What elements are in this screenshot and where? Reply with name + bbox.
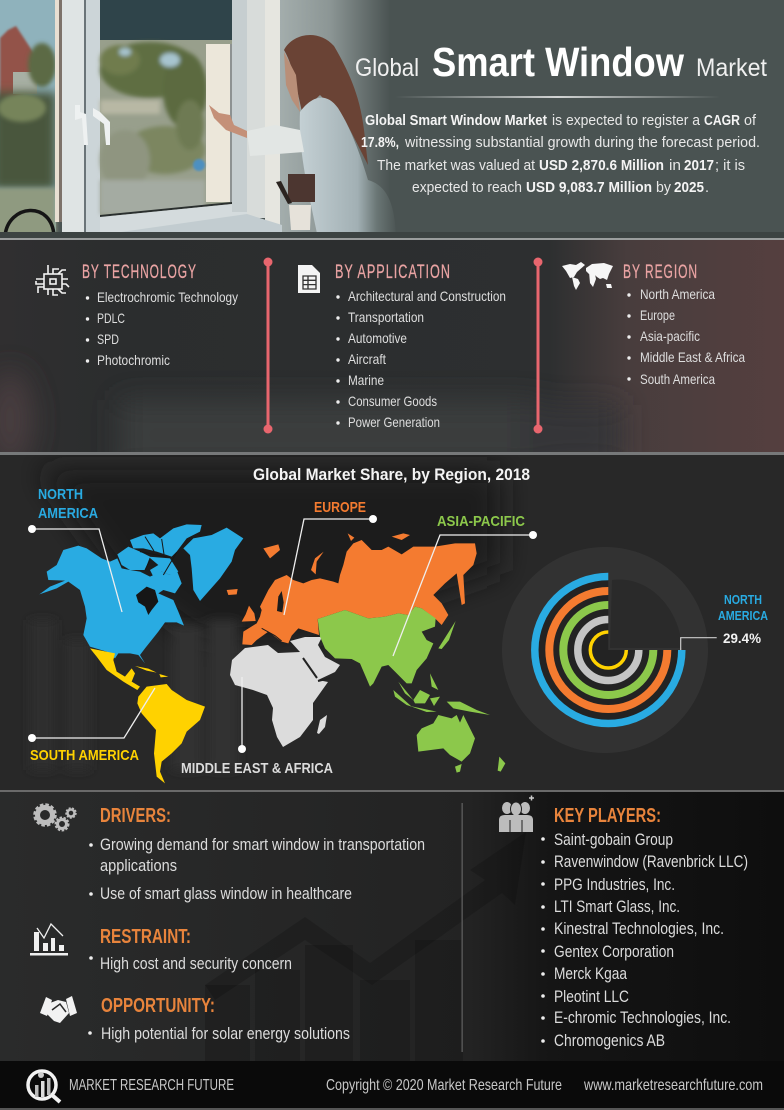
column: by technology: BY TECHNOLOGY xyxy=(82,262,197,283)
radial bar chart xyxy=(502,547,768,753)
panel: market dynamics xyxy=(0,792,784,1065)
application list: Power Generation xyxy=(348,414,440,430)
icon: white world map xyxy=(562,262,613,290)
label: south america: SOUTH AMERICA xyxy=(30,747,139,764)
icon: window handle xyxy=(75,105,110,145)
region list: Asia-pacific xyxy=(640,328,700,344)
column: by region xyxy=(562,262,745,387)
key players list: Pleotint LLC xyxy=(554,988,629,1006)
label: north america: AMERICA xyxy=(38,505,98,522)
application list: Automotive xyxy=(348,330,407,346)
intro paragraph: USD 2,870.6 Million xyxy=(539,158,664,174)
column: key players xyxy=(499,796,748,1050)
label: asia-pacific xyxy=(393,513,537,656)
label: europe xyxy=(284,499,377,615)
application list xyxy=(336,288,506,430)
drivers list: applications xyxy=(100,857,177,875)
black chair curve xyxy=(5,210,54,236)
column: key players: KEY PLAYERS: xyxy=(554,805,661,827)
column: drivers, restraint, opportunity: RESTRAINT: xyxy=(100,926,191,948)
column: by technology xyxy=(36,262,238,368)
woman face xyxy=(284,52,300,112)
label: north america: NORTH xyxy=(38,486,83,503)
woman hair xyxy=(284,35,368,165)
footer xyxy=(0,1061,784,1110)
heading: Global Market Share, by Region, 2018 xyxy=(253,465,530,484)
title: Smart Window xyxy=(432,39,684,85)
region list xyxy=(627,286,745,387)
key players list: PPG Industries, Inc. xyxy=(554,876,675,894)
label: europe: EUROPE xyxy=(314,499,366,516)
intro paragraph xyxy=(361,113,760,196)
divider: pink rod left xyxy=(264,258,272,434)
panel: segmentation xyxy=(0,240,784,470)
woman body xyxy=(300,98,396,238)
icon: document xyxy=(298,265,320,293)
intro paragraph: . xyxy=(705,180,709,196)
header panel xyxy=(0,0,784,240)
application list: Consumer Goods xyxy=(348,393,437,409)
intro paragraph: is expected to register a xyxy=(552,113,701,129)
mug with utensils xyxy=(276,174,315,230)
intro paragraph: CAGR xyxy=(704,113,740,129)
key players list: Merck Kgaa xyxy=(554,965,628,983)
technology list: Electrochromic Technology xyxy=(97,289,238,305)
intro paragraph: 17.8%, xyxy=(361,135,399,151)
callout: north america share xyxy=(681,592,768,650)
column: drivers, restraint, opportunity: DRIVERS: xyxy=(100,805,171,827)
icon: people group xyxy=(499,796,534,832)
technology list xyxy=(86,289,238,368)
intro paragraph: 2025 xyxy=(674,180,704,196)
region list: Middle East & Africa xyxy=(640,349,745,365)
key players list: Gentex Corporation xyxy=(554,943,674,961)
column: by application xyxy=(298,262,506,430)
icon: gears xyxy=(34,804,76,830)
application list: Transportation xyxy=(348,309,424,325)
intro paragraph: in xyxy=(669,158,681,174)
region list: North America xyxy=(640,286,715,302)
title: Market xyxy=(696,54,767,82)
key players list: E-chromic Technologies, Inc. xyxy=(554,1009,731,1027)
region: north america xyxy=(39,524,243,663)
label: north america xyxy=(28,486,122,612)
key players list: LTI Smart Glass, Inc. xyxy=(554,898,680,916)
intro paragraph: ; it is xyxy=(715,158,745,174)
icon: circuit chip xyxy=(36,265,69,295)
key players list: Saint-gobain Group xyxy=(554,831,673,849)
key players list xyxy=(541,831,748,1050)
application list: Architectural and Construction xyxy=(348,288,506,304)
intro paragraph: of xyxy=(744,113,757,129)
application list: Marine xyxy=(348,372,384,388)
footer: MARKET RESEARCH FUTURE xyxy=(69,1077,234,1094)
column: drivers, restraint, opportunity: OPPORTUNITY: xyxy=(101,995,215,1017)
technology list: SPD xyxy=(97,331,119,347)
world map xyxy=(39,524,505,783)
intro paragraph: USD 9,083.7 Million xyxy=(526,180,652,196)
region list: Europe xyxy=(640,307,675,323)
key players list: Chromogenics AB xyxy=(554,1032,665,1050)
intro paragraph: 2017 xyxy=(684,158,714,174)
woman hand xyxy=(209,105,247,138)
intro paragraph: Global Smart Window Market xyxy=(365,113,547,129)
footer: Copyright © 2020 Market Research Future xyxy=(326,1077,562,1094)
region: asia-pacific xyxy=(318,607,505,773)
intro paragraph: by xyxy=(656,180,672,196)
key players list: Kinestral Technologies, Inc. xyxy=(554,920,724,938)
intro paragraph: witnessing substantial growth during the forecast period. xyxy=(404,135,760,151)
application list: Aircraft xyxy=(348,351,386,367)
label: south america xyxy=(28,688,155,764)
column: drivers, restraint, opportunity xyxy=(30,804,425,1043)
title: Global xyxy=(355,54,419,82)
column: by application: BY APPLICATION xyxy=(335,262,451,283)
intro paragraph: The market was valued at xyxy=(377,158,535,174)
icon: market research future logo xyxy=(28,1071,60,1102)
opportunity list: High potential for solar energy solutions xyxy=(101,1025,350,1043)
divider: pink rod right xyxy=(534,258,542,434)
callout: north america share: 29.4% xyxy=(723,630,762,646)
callout: north america share: NORTH xyxy=(724,592,762,607)
drivers list: Growing demand for smart window in transportation xyxy=(100,836,425,854)
drivers list: Use of smart glass window in healthcare xyxy=(100,885,352,903)
region: europe and russia xyxy=(227,533,477,645)
header photo: woman at smart window xyxy=(0,0,784,238)
icon: falling bar chart xyxy=(30,924,68,956)
label: asia-pacific: ASIA-PACIFIC xyxy=(437,513,525,530)
leader lines and map labels xyxy=(28,486,537,777)
key players list: Ravenwindow (Ravenbrick LLC) xyxy=(554,853,748,871)
woman arm sleeve xyxy=(247,125,304,156)
intro paragraph: expected to reach xyxy=(412,180,522,196)
restraint list: High cost and security concern xyxy=(100,955,292,973)
region: south and central america xyxy=(90,648,205,783)
drivers list xyxy=(89,836,425,903)
label: middle east and africa xyxy=(181,677,333,777)
callout: north america share: AMERICA xyxy=(718,608,768,623)
title xyxy=(355,39,767,85)
region: middle east and africa xyxy=(230,637,340,747)
label: middle east and africa: MIDDLE EAST & AFRICA xyxy=(181,760,333,777)
technology list: Photochromic xyxy=(97,352,170,368)
region list: South America xyxy=(640,371,715,387)
icon: handshake xyxy=(40,996,77,1023)
column: by region: BY REGION xyxy=(623,262,698,283)
technology list: PDLC xyxy=(97,310,125,326)
panel: market share xyxy=(26,468,768,784)
